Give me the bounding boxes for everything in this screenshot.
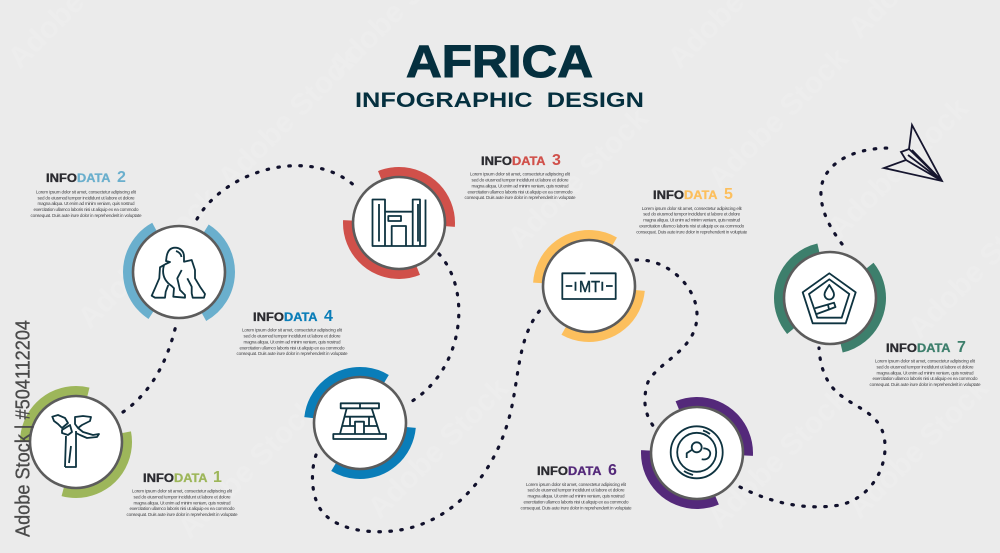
text: infodata 2: exercitation ullamco laboris nisi ut aliquip ex ea commodo: [34, 207, 139, 212]
text: infodata 1: consequat. Duis aute irure dolor in reprehenderit in voluptate: [126, 512, 238, 517]
white disc: [353, 177, 445, 269]
text: infodata 7: consequat. Duis aute irure dolor in reprehenderit in voluptate: [870, 382, 981, 387]
icon: gorilla: [152, 248, 205, 298]
text: infodata 4: INFO: [253, 310, 284, 324]
text: infodata 4: DATA: [284, 310, 318, 324]
text: infodata 7: DATA: [917, 341, 951, 355]
text: infodata 1: Lorem ipsum dolor sit amet, consectetur adipiscing elit: [132, 488, 233, 494]
text: infodata 3: sed do eiusmod tempor incididunt ut labore et dolore: [472, 178, 569, 183]
text: infodata 7: sed do eiusmod tempor incididunt ut labore et dolore: [876, 364, 974, 369]
panel: step 6: [520, 386, 764, 520]
ring arcs: [758, 226, 902, 370]
text: infodata 5: Lorem ipsum dolor sit amet, consectetur adipiscing elit: [642, 206, 742, 211]
text: infodata 4: consequat. Duis aute irure dolor in reprehenderit in voluptate: [236, 351, 348, 356]
dashed connector: step 3 to 4: [409, 254, 459, 403]
text: infodata 1: DATA: [174, 471, 208, 485]
panel: step 3: [333, 152, 576, 289]
text: infodata 6: DATA: [568, 464, 602, 478]
text: infodata 3: magna aliqua. Ut enim ad minim veniam, quis nostrud: [472, 183, 569, 188]
dashed connector: step 1 to 2: [123, 325, 176, 412]
text: Adobe Stock: [502, 102, 655, 255]
dashed connector: step 6 to 7: [740, 348, 885, 507]
text: infodata 2: [30, 169, 142, 218]
white disc: [651, 407, 743, 499]
ring arcs: [16, 382, 136, 502]
text: infodata 4: exercitation ullamco laboris nisi ut aliquip ex ea commodo: [240, 345, 345, 350]
text: infodata 4: sed do eiusmod tempor incididunt ut labore et dolore: [244, 334, 341, 339]
text: infodata 5: 5: [724, 186, 733, 203]
subtitle: INFOGRAPHIC DESIGN: [355, 89, 644, 112]
icon: baobab tree: [52, 415, 99, 467]
text: Adobe Stock: [212, 42, 365, 195]
text: infodata 6: [520, 462, 632, 510]
ring arcs: [304, 367, 416, 479]
text: infodata 2: magna aliqua. Ut enim ad minim veniam, quis nostrud: [38, 201, 135, 206]
text: infodata 2: 2: [117, 169, 126, 186]
text: infodata 7: Lorem ipsum dolor sit amet, consectetur adipiscing elit: [875, 358, 976, 363]
dashed connector: step 7 to plane: [821, 148, 890, 244]
text: infodata 1: exercitation ullamco laboris nisi ut aliquip ex ea commodo: [130, 506, 235, 511]
icon: IMT sign: [562, 273, 616, 299]
text: infodata 5: exercitation ullamco laboris nisi ut aliquip ex ea commodo: [639, 223, 745, 228]
white disc: [314, 377, 406, 469]
text: infodata 2: DATA: [77, 171, 111, 185]
text: infodata 6: sed do eiusmod tempor incididunt ut labore et dolore: [528, 488, 625, 493]
ring arcs: [333, 157, 465, 289]
text: infodata 2: Lorem ipsum dolor sit amet, consectetur adipiscing elit: [36, 189, 137, 194]
text: infodata 6: INFO: [537, 464, 568, 478]
text: Adobe Stock: [702, 42, 855, 195]
white disc: [784, 252, 876, 344]
icon: gate building: [372, 200, 426, 246]
dashed connector: step 2 to 3: [197, 166, 356, 219]
text: infodata 1: 1: [213, 469, 222, 486]
text: infodata 2: sed do eiusmod tempor incididunt ut labore et dolore: [38, 195, 135, 200]
text: infodata 4: magna aliqua. Ut enim ad minim veniam, quis nostrud: [244, 340, 341, 345]
text: infodata 5: consequat. Duis aute irure dolor in reprehenderit in voluptate: [636, 229, 748, 234]
icon: coin: [671, 426, 723, 478]
text: Adobe Stock: [842, 372, 995, 525]
text: infodata 6: Lorem ipsum dolor sit amet, consectetur adipiscing elit: [526, 482, 627, 487]
text: infodata 3: [464, 152, 576, 200]
text: infodata 3: Lorem ipsum dolor sit amet, consectetur adipiscing elit: [470, 172, 571, 177]
text: infodata 5: magna aliqua. Ut enim ad minim veniam, quis nostrud: [643, 218, 741, 223]
text: infodata 7: 7: [957, 339, 966, 356]
panel: step 2: [30, 169, 250, 343]
text: Adobe Stock: [822, 92, 975, 245]
text: infodata 5: DATA: [684, 188, 718, 202]
text: Adobe Stock: [172, 392, 325, 545]
text: infodata 6: exercitation ullamco laboris nisi ut aliquip ex ea commodo: [524, 500, 629, 505]
text: infodata 2: INFO: [46, 171, 77, 185]
ring arcs: [534, 231, 644, 341]
text: infodata 3: DATA: [512, 154, 546, 168]
icon: stepped temple: [333, 403, 386, 439]
text: infodata 4: Lorem ipsum dolor sit amet, consectetur adipiscing elit: [242, 328, 343, 333]
text: infodata 3: exercitation ullamco laboris nisi ut aliquip ex ea commodo: [468, 189, 573, 194]
panel: step 1: [16, 382, 238, 517]
white disc: [133, 226, 225, 318]
text: infodata 1: [126, 469, 238, 517]
text: infodata 3: consequat. Duis aute irure dolor in reprehenderit in voluptate: [464, 195, 576, 200]
text: Adobe Stock: [362, 372, 515, 525]
text: infodata 5: sed do eiusmod tempor incididunt ut labore et dolore: [643, 212, 741, 217]
text: Adobe Stock: [702, 382, 855, 535]
icon: pentagon with match and drop: [803, 273, 856, 323]
text: infodata 1: magna aliqua. Ut enim ad minim veniam, quis nostrud: [134, 500, 231, 505]
text: infodata 1: INFO: [143, 471, 174, 485]
white disc: [543, 240, 635, 332]
white disc: [30, 396, 122, 488]
icon: paper plane: [884, 125, 942, 181]
text: infodata 4: 4: [324, 308, 333, 325]
text: infodata 7: INFO: [886, 341, 917, 355]
title: AFRICA: [406, 36, 593, 87]
text: infodata 7: magna aliqua. Ut enim ad minim veniam, quis nostrud: [876, 370, 974, 375]
ring arcs: [630, 386, 764, 520]
text: infodata 7: exercitation ullamco laboris nisi ut aliquip ex ea commodo: [872, 376, 978, 381]
dashed connector: step 5 to 6: [636, 260, 697, 427]
text: infodata 7: [870, 339, 981, 387]
panel: step 7: [758, 226, 981, 387]
text: infodata 6: consequat. Duis aute irure dolor in reprehenderit in voluptate: [520, 505, 632, 510]
panel: step 5: [534, 186, 748, 341]
text: infodata 3: INFO: [481, 154, 512, 168]
stock id side text: Adobe Stock | #504112204: [12, 320, 34, 537]
text: infodata 2: consequat. Duis aute irure dolor in reprehenderit in voluptate: [30, 213, 142, 218]
ring arcs: [108, 201, 250, 343]
icon: IMT sign: MT: [579, 279, 600, 296]
dashed connector: step 4 to 5: [312, 309, 541, 532]
text: infodata 1: sed do eiusmod tempor incididunt ut labore et dolore: [134, 494, 231, 500]
text: infodata 6: magna aliqua. Ut enim ad minim veniam, quis nostrud: [528, 494, 625, 499]
text: infodata 4: [236, 308, 348, 356]
text: infodata 6: 6: [608, 462, 617, 479]
text: infodata 5: [636, 186, 748, 234]
text: infodata 5: INFO: [653, 188, 684, 202]
text: Adobe Stock: [72, 182, 225, 335]
panel: step 4: [236, 308, 416, 479]
text: infodata 3: 3: [552, 152, 561, 169]
